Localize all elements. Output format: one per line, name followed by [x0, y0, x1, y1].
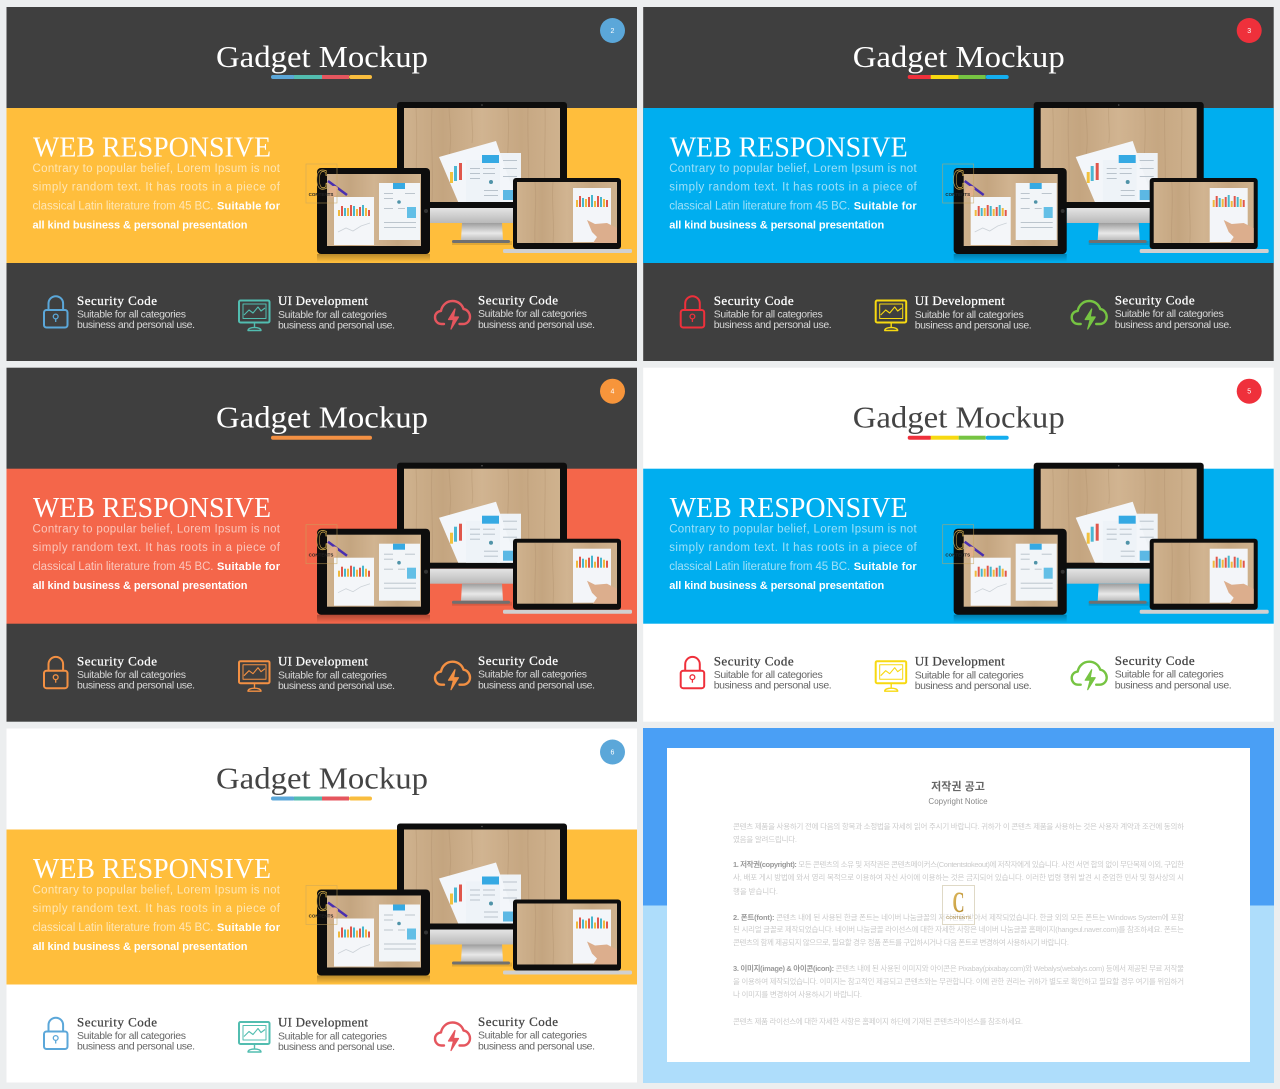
panel: slide 6 white yellow: [6, 728, 637, 1082]
feature: cloud security code: business and personal use.: [478, 680, 595, 692]
body text: simply random text. It has roots in a piece of: [669, 182, 917, 194]
feature: ui development: Suitable for all categories: [278, 670, 387, 682]
feature: ui development: Suitable for all categories: [915, 309, 1024, 321]
colored band: [6, 108, 637, 263]
body text: all kind business & personal presentation: [669, 220, 884, 232]
paragraph: image and icon: 을 이용하여 제작되었습니다. 이미지는 참고적인 제공되고 콘텐츠와는 무관합니다. 이에 관한 권리는 귀하가 별도로 확인하고 필요할 경우 여기를 위임하거: [733, 976, 1184, 986]
body text: simply random text. It has roots in a piece of: [32, 903, 281, 915]
feature: cloud security code: [435, 292, 595, 331]
paragraph: copyright: 사, 배포 게시 방법에 와서 영리 목적으로 이용하여 자신 사이에 이용하는 것은 금지되어 있습니다. 이러한 법령 행위 발견 시 준엄한 민사 및 형사상의 시: [733, 872, 1184, 882]
title color underline: [908, 75, 1009, 79]
body text: Contrary to popular belief, Lorem Ipsum is not: [669, 524, 917, 536]
paragraph: copyright: 1. 저작권(copyright): 모든 콘텐츠의 소유 및 저작권은 콘텐츠메이커스(Contentstokeout)에 저작자에게 있습니다. 사전 서면 합의 없이 무단복제 이외, 구입한: [733, 859, 1184, 869]
panel: slide 3 dark blue: [643, 7, 1274, 361]
heading: web responsive: WEB RESPONSIVE: [33, 132, 271, 164]
colored band: [643, 469, 1274, 624]
feature: cloud security code: Suitable for all categories: [1115, 669, 1224, 681]
feature: security code: Suitable for all categories: [714, 669, 823, 681]
body text: [32, 163, 281, 232]
title color underline: [271, 436, 372, 440]
background upper blue: [643, 728, 1274, 906]
feature: ui development: business and personal use.: [915, 320, 1032, 332]
feature: security code: Suitable for all categories: [77, 669, 186, 681]
panel: slide 5 white blue: [643, 368, 1274, 722]
body text: Suitable for: [217, 561, 281, 573]
notice title: 저작권 공고: [931, 779, 985, 793]
feature: security code: business and personal use.: [714, 680, 832, 692]
feature: security code: business and personal use.: [77, 1040, 195, 1052]
body text: classical Latin literature from 45 BC.: [669, 561, 850, 573]
feature: security code: Security Code: [77, 293, 157, 308]
feature: cloud security code: [1072, 653, 1232, 692]
feature: security code: Security Code: [714, 293, 794, 308]
feature: ui development: Suitable for all categories: [278, 309, 387, 321]
page badge: [600, 379, 625, 404]
page badge: 2: [611, 28, 615, 35]
watermark: [306, 525, 337, 564]
feature: cloud security code: Suitable for all categories: [1115, 308, 1224, 320]
body text: simply random text. It has roots in a piece of: [32, 182, 281, 194]
feature: cloud security code: Security Code: [478, 653, 558, 668]
body text: simply random text. It has roots in a piece of: [32, 542, 281, 554]
watermark: [943, 525, 974, 564]
feature: ui development: business and personal use.: [915, 680, 1032, 692]
feature: cloud security code: [435, 653, 595, 692]
feature: security code: Suitable for all categories: [77, 308, 186, 320]
body text: Suitable for: [854, 200, 917, 212]
page badge: [600, 18, 625, 43]
feature: cloud security code: Security Code: [1115, 292, 1195, 308]
feature: security code: business and personal use.: [77, 319, 195, 331]
page badge: 3: [1247, 28, 1251, 35]
feature: ui development: [239, 1014, 395, 1053]
body text: Suitable for: [217, 200, 281, 212]
feature: cloud security code: Security Code: [478, 1014, 558, 1029]
feature: security code: Security Code: [714, 654, 794, 669]
slide background: [6, 7, 637, 361]
feature: cloud security code: Suitable for all categories: [478, 1030, 587, 1042]
title: Gadget Mockup: [853, 400, 1065, 435]
paragraph: image and icon: [733, 963, 1184, 999]
colored band: [6, 469, 637, 624]
body text: all kind business & personal presentation: [32, 580, 248, 592]
feature: cloud security code: business and personal use.: [1115, 319, 1232, 331]
feature: security code: [44, 654, 195, 692]
feature: security code: [44, 293, 195, 331]
page badge: 5: [1247, 389, 1251, 396]
body text: Contrary to popular belief, Lorem Ipsum is not: [669, 163, 917, 175]
feature: ui development: business and personal use.: [278, 1041, 395, 1053]
body text: classical Latin literature from 45 BC.: [32, 922, 214, 934]
feature: ui development: business and personal use.: [278, 320, 395, 332]
heading: web responsive: WEB RESPONSIVE: [33, 853, 271, 885]
feature: cloud security code: Suitable for all categories: [478, 308, 587, 320]
paragraph: copyright: 행을 받습니다.: [733, 886, 778, 896]
background lower light blue: [643, 906, 1274, 1083]
slide background: [643, 368, 1274, 722]
feature: cloud security code: [435, 1014, 595, 1052]
feature: ui development: [239, 293, 395, 332]
paragraph: image and icon: 나 이미지를 변경하여 사용하시기 바랍니다.: [733, 989, 862, 999]
feature: ui development: Suitable for all categories: [278, 1030, 387, 1042]
feature: cloud security code: [1072, 292, 1232, 331]
body text: [669, 163, 917, 232]
paragraph: font: [733, 912, 1184, 947]
body text: all kind business & personal presentation: [32, 220, 248, 232]
title: Gadget Mockup: [853, 39, 1065, 74]
feature: security code: Security Code: [77, 654, 157, 669]
feature: ui development: UI Development: [915, 654, 1005, 669]
intro paragraph: [733, 821, 1184, 844]
title color underline: [908, 436, 1009, 440]
feature: cloud security code: business and personal use.: [478, 1040, 595, 1052]
slide background: [6, 728, 637, 1082]
paragraph: copyright: [733, 859, 1184, 896]
watermark: [306, 164, 337, 203]
body text: classical Latin literature from 45 BC.: [32, 200, 214, 212]
feature: cloud security code: business and personal use.: [1115, 680, 1232, 692]
body text: Contrary to popular belief, Lorem Ipsum is not: [32, 163, 281, 175]
body text: Contrary to popular belief, Lorem Ipsum is not: [32, 884, 281, 896]
paragraph: font: 2. 폰트(font): 콘텐츠 내에 된 사용된 한글 폰트는 네이버 나눔글꼴의 저작권을 받아서 제작되었습니다. 한글 외의 모든 폰트는 Windows System에 포함: [733, 912, 1184, 922]
watermark: [306, 886, 337, 924]
slide background: [6, 368, 637, 722]
intro paragraph: 콘텐츠 제품을 사용하기 전에 다음의 항목과 소정법을 자세히 읽어 주시기 바랍니다. 귀하가 이 콘텐츠 제품을 사용하는 것은 사용자 계약과 조건에 동의하: [733, 821, 1184, 831]
feature: security code: [681, 293, 832, 331]
feature: ui development: Suitable for all categories: [915, 670, 1024, 682]
body text: Contrary to popular belief, Lorem Ipsum is not: [32, 524, 281, 536]
body text: simply random text. It has roots in a piece of: [669, 542, 917, 554]
panel: copyright notice: [643, 728, 1274, 1083]
feature: ui development: UI Development: [278, 654, 368, 669]
feature: ui development: UI Development: [915, 293, 1005, 308]
title: Gadget Mockup: [216, 760, 428, 796]
closing line: 콘텐츠 제품 라이선스에 대한 자세한 사항은 홈페이지 하단에 기재된 콘텐츠라이선스를 참조하세요.: [733, 1016, 1023, 1026]
feature: ui development: [876, 654, 1032, 692]
device mockup: [317, 463, 632, 623]
body text: all kind business & personal presentation: [32, 941, 248, 953]
device mockup: [954, 463, 1269, 623]
body text: [32, 524, 281, 592]
watermark: C: [952, 886, 964, 919]
heading: web responsive: WEB RESPONSIVE: [33, 492, 271, 524]
colored band: [643, 108, 1274, 263]
watermark: [942, 886, 974, 924]
feature: ui development: [876, 293, 1032, 332]
title color underline: [271, 796, 372, 800]
feature: ui development: UI Development: [278, 1014, 368, 1030]
page badge: [1237, 379, 1262, 404]
paragraph: font: 콘텐츠의 함께 제공되지 않으므로, 필요할 경우 정품 폰트를 구입하시거나 다음 폰트로 변경하여 사용하시기 바랍니다.: [733, 937, 1069, 947]
feature: ui development: business and personal use.: [278, 680, 395, 692]
page badge: 6: [611, 750, 615, 756]
body text: Suitable for: [854, 561, 917, 573]
page badge: 4: [611, 389, 615, 396]
title color underline: [271, 75, 372, 79]
notice subtitle: Copyright Notice: [928, 797, 988, 806]
title: Gadget Mockup: [216, 39, 428, 74]
feature: security code: Suitable for all categories: [77, 1030, 186, 1042]
device mockup: [954, 102, 1269, 262]
feature: security code: business and personal use.: [77, 680, 195, 692]
paragraph: image and icon: 3. 이미지(image) & 아이콘(icon): 콘텐츠 내에 된 사용된 이미지와 아이콘은 Pixabay(pixabay.com)와 Webalys(webalys.com) 등에서 제공된 무료 저작물: [733, 963, 1184, 973]
title: Gadget Mockup: [216, 400, 428, 435]
intro paragraph: 였음을 알려드립니다.: [733, 834, 797, 844]
heading: web responsive: WEB RESPONSIVE: [670, 132, 908, 164]
panel: slide 2 dark yellow: [6, 7, 637, 361]
feature: security code: Suitable for all categories: [714, 308, 823, 320]
feature: cloud security code: Security Code: [478, 292, 558, 308]
feature: ui development: [239, 654, 395, 692]
slide background: [643, 7, 1274, 361]
heading: web responsive: WEB RESPONSIVE: [670, 492, 908, 524]
feature: ui development: UI Development: [278, 293, 368, 308]
watermark: CONTENTS: [946, 915, 971, 920]
body text: classical Latin literature from 45 BC.: [669, 200, 850, 212]
colored band: [6, 830, 637, 984]
page badge: [1237, 18, 1262, 43]
feature: cloud security code: Security Code: [1115, 653, 1195, 668]
panel: slide 4 dark coral: [6, 368, 637, 722]
body text: Suitable for: [217, 922, 281, 934]
body text: all kind business & personal presentation: [669, 580, 884, 592]
feature: cloud security code: business and personal use.: [478, 319, 595, 331]
device mockup: [317, 102, 632, 262]
feature: security code: business and personal use.: [714, 319, 832, 331]
white card: [667, 748, 1250, 1062]
feature: security code: [681, 654, 832, 692]
paragraph: font: 된 시리얼 글꼴로 제작되었습니다. 네이버 나눔글꼴 라이선스에 대한 자세한 사항은 네이버 나눔글꼴 홈페이지(hangeul.naver.com)를 참조하세요. 폰트는: [733, 924, 1184, 934]
watermark: [943, 164, 974, 203]
feature: security code: [44, 1014, 195, 1052]
body text: classical Latin literature from 45 BC.: [32, 561, 214, 573]
device mockup: [317, 824, 632, 984]
feature: security code: Security Code: [77, 1014, 157, 1030]
page badge: [600, 740, 625, 764]
body text: [669, 524, 917, 592]
body text: [32, 884, 281, 953]
feature: cloud security code: Suitable for all categories: [478, 669, 587, 681]
